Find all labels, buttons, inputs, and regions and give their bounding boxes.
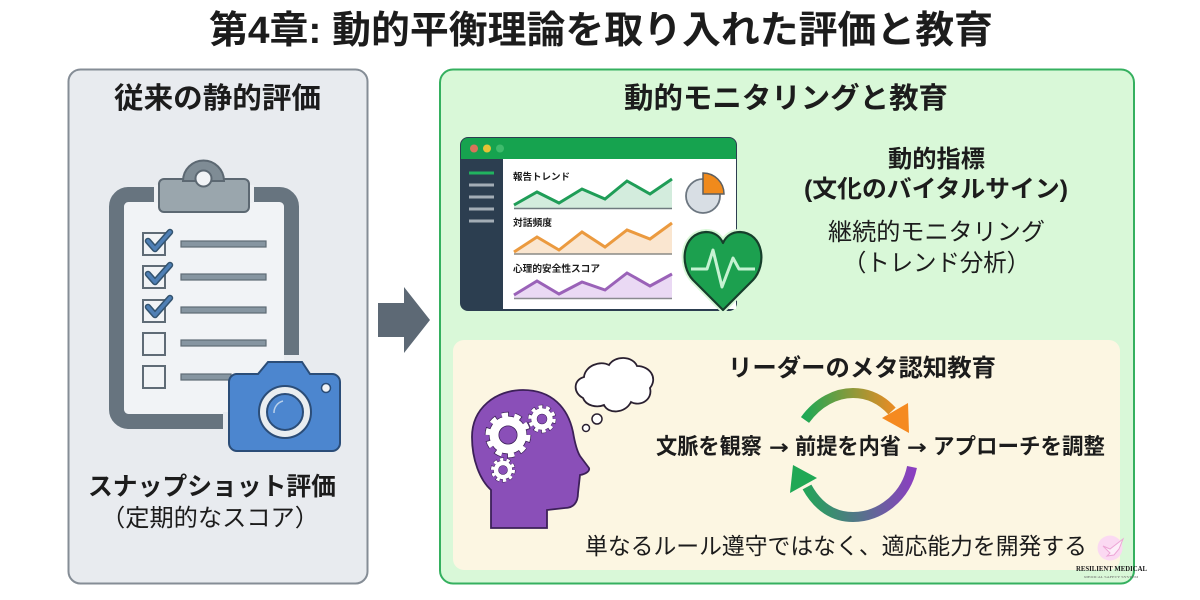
text: process steps: 前提を内省 [795,434,901,459]
heading: leader metacognition: リーダーのメタ認知教育 [728,354,996,382]
text: process steps: → [907,435,927,459]
chart: dialogue frequency: 対話頻度 [513,217,552,229]
dashboard window [460,137,737,311]
icon: head with gears [472,390,589,528]
icon: heart with pulse [685,232,761,310]
text: dynamic indicators: 動的指標 [888,146,985,173]
chart: report trend: 報告トレンド [513,171,570,183]
text: process steps: アプローチを調整 [933,434,1105,459]
label: periodic score: （定期的なスコア） [101,505,319,532]
title: 第4章: 動的平衡理論を取り入れた評価と教育 [209,10,993,52]
icon: camera [229,362,340,451]
text: adaptive capability: 単なるルール遵守ではなく、適応能力を開発する [585,533,1087,559]
text: process steps [656,434,1105,459]
text: trend analysis: （トレンド分析） [843,250,1030,277]
icon: clipboard [116,161,300,431]
arrow: cycle bottom [790,465,912,517]
panel: dynamic monitoring [440,70,1134,584]
panel: leader metacognition [453,340,1120,570]
arrow: static to dynamic [378,287,430,353]
heading: dynamic monitoring: 動的モニタリングと教育 [624,82,948,115]
text: process steps: 文脈を観察 [656,434,762,459]
logo: resilient medical: MEDICAL SAFETY SYSTEM [1084,575,1139,579]
text: process steps: → [769,435,789,459]
chart: pie [686,173,724,213]
icon: thought cloud [576,358,653,432]
logo: resilient medical [1076,536,1147,579]
chart: report trend [513,171,672,208]
chart: psychological safety score [513,263,672,298]
logo: resilient medical: RESILIENT MEDICAL [1076,564,1147,573]
panel: static assessment [68,70,368,584]
checklist rows [143,232,266,388]
label: snapshot assessment: スナップショット評価 [88,473,336,501]
heading: static assessment: 従来の静的評価 [114,82,321,115]
chart: dialogue frequency [513,217,672,254]
arrow: cycle top [805,393,909,433]
text: continuous monitoring: 継続的モニタリング [828,219,1045,246]
chart: psychological safety score: 心理的安全性スコア [513,263,600,275]
text: vital signs of culture: (文化のバイタルサイン) [804,176,1068,203]
